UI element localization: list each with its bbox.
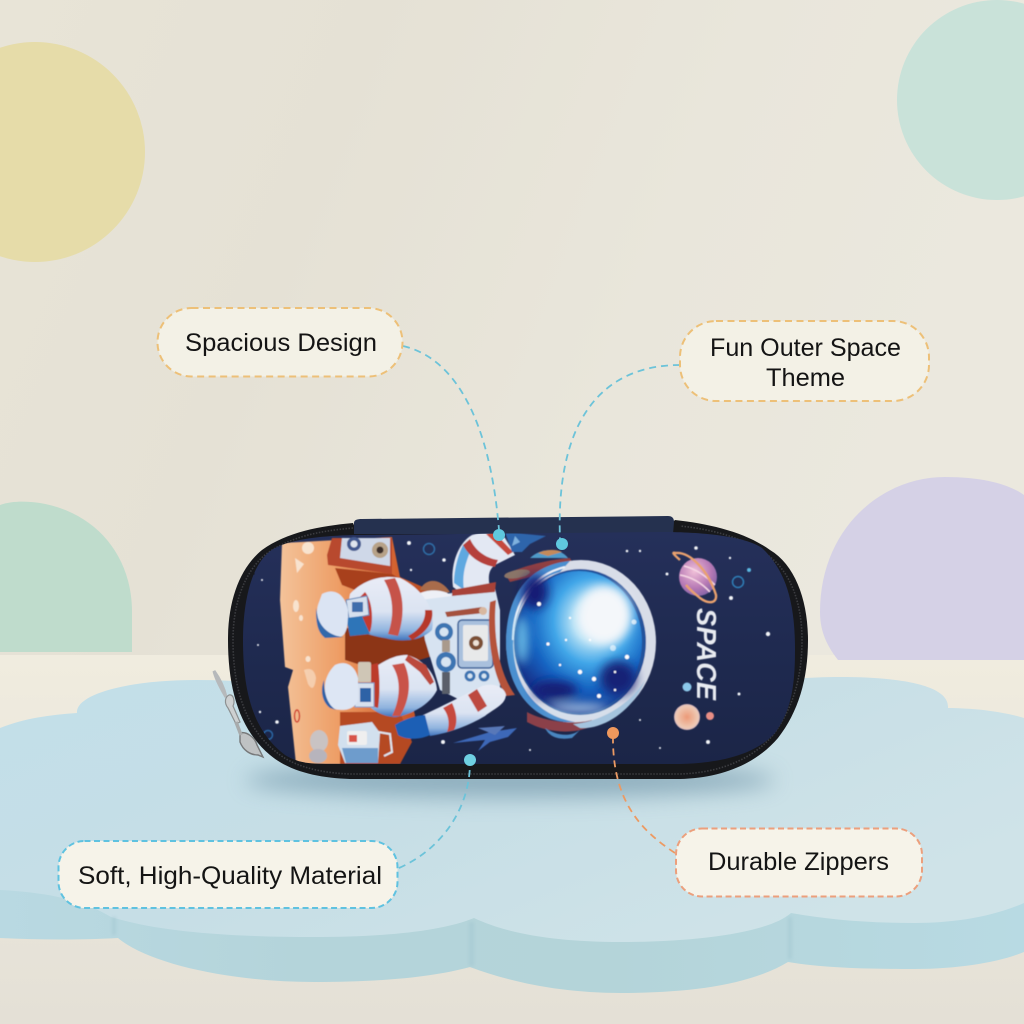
cloud side wall bbox=[0, 885, 1024, 993]
zipper band bbox=[228, 520, 808, 779]
helmet collar strap bbox=[505, 558, 574, 582]
small planets bbox=[264, 544, 751, 740]
astronaut lower arm bbox=[395, 685, 506, 739]
callout: spacious design bbox=[158, 308, 402, 376]
neck collar bbox=[527, 712, 592, 732]
camera device bbox=[327, 537, 392, 574]
cloud platform bbox=[0, 677, 1024, 993]
terrain lower shade bbox=[340, 712, 412, 764]
top handle flap bbox=[354, 516, 674, 534]
zipper teeth bbox=[233, 526, 802, 774]
terrain red shade under camera bbox=[334, 568, 398, 590]
bottom device bbox=[338, 722, 392, 763]
cloud notch shading bbox=[112, 917, 792, 966]
callout: soft high-quality material: Soft, High-Quality Material bbox=[78, 862, 382, 890]
nebula bbox=[516, 575, 636, 712]
decor: green half circle bbox=[0, 502, 132, 652]
helmet ring bbox=[506, 560, 656, 724]
case front panel bbox=[243, 532, 795, 764]
terrain shade between legs bbox=[344, 628, 430, 666]
connector: soft material bbox=[399, 754, 476, 868]
case contact shadow bbox=[245, 762, 775, 798]
callout: fun outer space theme: Theme bbox=[766, 364, 845, 392]
callout: fun outer space theme bbox=[680, 321, 929, 401]
saturn planet bbox=[673, 553, 717, 602]
decor: lavender half circle bbox=[820, 477, 1024, 660]
chest rings bbox=[435, 623, 453, 641]
decor: teal circle bbox=[897, 0, 1024, 200]
callout: soft high-quality material bbox=[58, 841, 398, 908]
rocket bbox=[453, 726, 517, 751]
astronaut torso bbox=[418, 581, 515, 705]
boot bbox=[325, 663, 358, 710]
connector: durable zippers bbox=[607, 727, 675, 853]
astronaut upper arm bbox=[452, 532, 546, 592]
visor stars bbox=[537, 602, 636, 698]
space logo text: SPACE bbox=[691, 608, 722, 701]
zipper pull bbox=[214, 671, 263, 757]
connector: spacious design bbox=[403, 346, 505, 541]
callout: fun outer space theme: Fun Outer Space bbox=[710, 334, 901, 362]
astronaut upper leg bbox=[316, 577, 433, 640]
callout: durable zippers bbox=[676, 828, 922, 896]
callout: durable zippers: Durable Zippers bbox=[708, 848, 889, 876]
decor: yellow circle bbox=[0, 42, 145, 262]
terrain highlights bbox=[293, 542, 328, 763]
callout: spacious design: Spacious Design bbox=[185, 329, 377, 357]
astronaut lower leg bbox=[322, 655, 437, 717]
cloud top surface bbox=[0, 677, 1024, 942]
scattered stars bbox=[257, 541, 770, 751]
visor glass bbox=[516, 571, 642, 713]
martian terrain bbox=[280, 537, 445, 764]
pencil case bbox=[214, 516, 808, 779]
printed artwork bbox=[257, 532, 770, 764]
connector: fun outer space theme bbox=[556, 365, 680, 550]
astronaut helmet bbox=[504, 550, 656, 739]
boot bbox=[317, 591, 348, 637]
chest panel bbox=[458, 620, 493, 668]
strap along helmet bbox=[489, 600, 515, 696]
